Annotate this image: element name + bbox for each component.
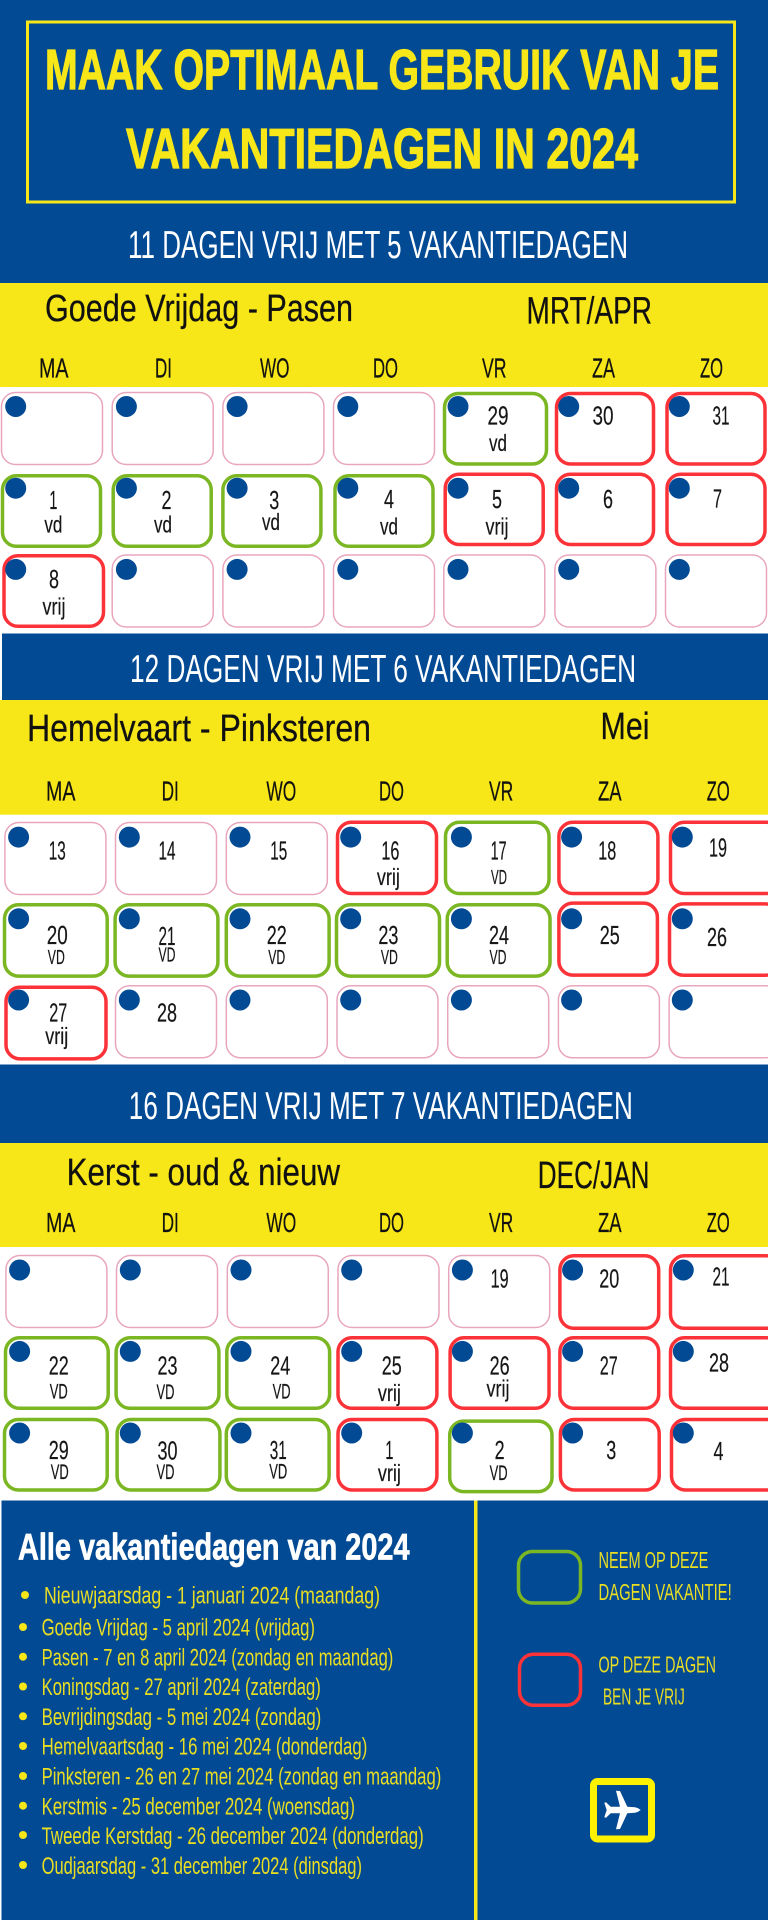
cell: 31 VD bbox=[226, 1420, 329, 1490]
cell: 22 VD bbox=[226, 905, 329, 976]
weekday row: DI bbox=[155, 353, 172, 384]
list item: Nieuwjaarsdag - 1 januari 2024 (maandag) bbox=[44, 1583, 380, 1610]
cell: 2 vd bbox=[113, 476, 211, 546]
cell: 6 bbox=[556, 474, 654, 544]
weekday row: MA bbox=[46, 1207, 76, 1238]
cell: 7 bbox=[667, 474, 765, 544]
empty cell bbox=[448, 986, 549, 1058]
cell: 3 vd: 3 bbox=[269, 485, 279, 515]
cell: 1 vrij bbox=[338, 1420, 437, 1490]
cell: 5 vrij: vrij bbox=[486, 514, 508, 540]
weekday row: DO bbox=[379, 775, 404, 806]
weekday row: VR bbox=[482, 353, 506, 384]
list item: Oudjaarsdag - 31 december 2024 (dinsdag) bbox=[42, 1853, 362, 1880]
subtitle: Goede Vrijdag: Goede Vrijdag - Pasen bbox=[45, 288, 353, 330]
weekday row: ZO bbox=[707, 1207, 730, 1238]
cell: 17 VD: 17 bbox=[491, 836, 507, 866]
panel: footer bbox=[2, 1500, 768, 1920]
cell: 22 VD bbox=[6, 1338, 108, 1408]
empty cell bbox=[226, 986, 327, 1058]
weekday row: WO bbox=[266, 775, 296, 806]
cell: 29 VD: VD bbox=[51, 1461, 69, 1484]
cell: 21 VD: VD bbox=[158, 945, 176, 967]
weekday row: DI bbox=[162, 1207, 179, 1238]
cell: 6: 6 bbox=[603, 484, 613, 514]
cell: 29 VD: 29 bbox=[49, 1435, 69, 1465]
cell: 13 bbox=[5, 822, 106, 894]
cell: 2 vd: 2 bbox=[162, 485, 172, 515]
list item bbox=[19, 1793, 355, 1820]
empty cell bbox=[6, 1256, 107, 1328]
cell: 26 vrij bbox=[450, 1338, 549, 1408]
cell: 26 bbox=[670, 904, 768, 975]
empty cell bbox=[334, 555, 434, 627]
list item: Pasen - 7 en 8 april 2024 (zondag en maandag) bbox=[42, 1644, 393, 1671]
cell: 15 bbox=[226, 822, 327, 894]
empty cell bbox=[669, 986, 768, 1058]
legend: red bbox=[520, 1652, 716, 1710]
cell: 23 VD: 23 bbox=[378, 920, 398, 950]
subtitle: Hemelvaart: Hemelvaart - Pinksteren bbox=[27, 708, 371, 750]
title frame bbox=[28, 22, 734, 202]
cell: 5 vrij: 5 bbox=[492, 484, 502, 514]
cell: 5 vrij bbox=[445, 474, 543, 544]
cell: 26 vrij: vrij bbox=[486, 1375, 510, 1401]
list item bbox=[19, 1644, 393, 1671]
cell: 4 vd: vd bbox=[380, 514, 398, 540]
cell: 18: 18 bbox=[598, 836, 616, 866]
cell: 1 vd bbox=[2, 476, 100, 546]
empty cell bbox=[555, 555, 656, 627]
cell: 4 vd: 4 bbox=[384, 484, 394, 514]
empty cell bbox=[112, 555, 213, 627]
empty cell bbox=[444, 555, 545, 627]
header panel bbox=[0, 0, 768, 283]
panel: holiday list bbox=[18, 1527, 441, 1880]
icon: airplane bbox=[594, 1782, 652, 1839]
cell: 25 bbox=[559, 903, 657, 975]
cell: 4 vd bbox=[335, 476, 433, 546]
cell: 21 VD: 21 bbox=[158, 921, 176, 951]
cell: 25 vrij: 25 bbox=[382, 1351, 402, 1381]
cell: 1 vd: 1 bbox=[49, 485, 57, 515]
weekday row: ZA bbox=[592, 353, 615, 384]
cell: 22 VD: VD bbox=[50, 1380, 68, 1403]
month: MRT/APR: MRT/APR bbox=[526, 291, 652, 333]
cell: 22 VD: 22 bbox=[49, 1351, 69, 1381]
cell: 17 VD bbox=[446, 822, 549, 894]
weekday row: ZA bbox=[598, 775, 622, 806]
month: Mei: Mei bbox=[600, 706, 650, 748]
weekday row: VR bbox=[489, 1207, 513, 1238]
weekday row: WO bbox=[260, 353, 290, 384]
cell: 4 bbox=[672, 1420, 768, 1490]
cell: 3 vd bbox=[223, 476, 321, 546]
weekday row: ZA bbox=[598, 1207, 622, 1238]
list item: Koningsdag - 27 april 2024 (zaterdag) bbox=[42, 1674, 321, 1701]
list heading: Alle vakantiedagen van 2024 bbox=[18, 1527, 410, 1568]
list item: Hemelvaartsdag - 16 mei 2024 (donderdag) bbox=[42, 1734, 367, 1761]
cell: 8 vrij: vrij bbox=[42, 593, 66, 619]
weekday row bbox=[46, 775, 730, 806]
cell: 17 VD: VD bbox=[491, 867, 507, 889]
cell: 22 VD: 22 bbox=[267, 920, 287, 950]
panel: section 1 header bbox=[0, 283, 768, 387]
cell: 29 vd: 29 bbox=[488, 400, 508, 430]
cell: 16 vrij: 16 bbox=[381, 836, 399, 866]
panel: calendar 2 bbox=[4, 822, 768, 1059]
empty cell bbox=[558, 986, 659, 1058]
cell: 27 vrij: 27 bbox=[49, 998, 67, 1028]
cell: 3 vd: vd bbox=[262, 509, 280, 535]
list item bbox=[19, 1764, 441, 1790]
legend: green bbox=[518, 1547, 732, 1605]
cell: 23 VD bbox=[116, 1338, 219, 1408]
cell: 8 vrij: 8 bbox=[49, 564, 59, 594]
cell: 4: 4 bbox=[714, 1436, 724, 1466]
legend: green: NEEM OP DEZE bbox=[598, 1547, 708, 1573]
weekday row: DO bbox=[373, 353, 398, 384]
cell: 20 VD: 20 bbox=[47, 920, 68, 950]
cell: 27 bbox=[560, 1338, 659, 1408]
cell: 23 VD: VD bbox=[381, 947, 398, 969]
weekday row: MA bbox=[46, 775, 76, 806]
cell: 2 VD: 2 bbox=[495, 1435, 505, 1465]
empty cell bbox=[337, 986, 438, 1058]
cell: 29 vd: vd bbox=[489, 430, 507, 456]
list item bbox=[19, 1823, 424, 1850]
cell: 20 bbox=[560, 1256, 659, 1328]
cell: 20 VD: VD bbox=[48, 947, 65, 969]
cell: 7: 7 bbox=[713, 483, 722, 513]
cell: 21: 21 bbox=[712, 1262, 730, 1292]
cell: 28 bbox=[670, 1338, 768, 1408]
cell: 3 bbox=[560, 1420, 659, 1490]
cell: 1 vd: vd bbox=[44, 512, 62, 538]
weekday row: ZO bbox=[700, 353, 723, 384]
cell: 2 vd: vd bbox=[154, 512, 172, 538]
list item bbox=[19, 1614, 315, 1642]
cell: 25 vrij bbox=[338, 1338, 437, 1408]
cell: 21 bbox=[670, 1256, 768, 1328]
cell: 28: 28 bbox=[709, 1347, 729, 1377]
cell: 23 VD: VD bbox=[156, 1381, 174, 1404]
empty cell bbox=[223, 555, 324, 627]
cell: 14 bbox=[116, 822, 216, 894]
cell: 30 VD bbox=[117, 1420, 220, 1490]
weekday row bbox=[39, 353, 723, 384]
title bbox=[45, 38, 719, 181]
weekday row: VR bbox=[489, 775, 513, 806]
cell: 2 VD: VD bbox=[490, 1462, 508, 1485]
cell: 1 vrij: vrij bbox=[378, 1460, 401, 1486]
cell: 25: 25 bbox=[600, 920, 620, 950]
weekday row: ZO bbox=[707, 775, 730, 806]
cell: 30 VD: VD bbox=[156, 1461, 174, 1484]
cell: 19 bbox=[449, 1256, 550, 1328]
legend: red: BEN JE VRIJ bbox=[603, 1684, 685, 1710]
list item: Goede Vrijdag - 5 april 2024 (vrijdag) bbox=[42, 1614, 315, 1642]
cell: 30: 30 bbox=[592, 400, 614, 430]
cell: 27 vrij bbox=[6, 987, 106, 1059]
cell: 30 bbox=[556, 394, 654, 464]
cell: 14: 14 bbox=[158, 836, 176, 866]
cell: 19: 19 bbox=[491, 1263, 509, 1293]
cell: 26: 26 bbox=[707, 922, 727, 952]
cell: 22 VD: VD bbox=[268, 947, 285, 969]
list item bbox=[19, 1853, 362, 1880]
panel: calendar 1 bbox=[2, 392, 766, 627]
empty cell bbox=[112, 392, 213, 464]
cell: 31 bbox=[667, 394, 765, 464]
cell: 31: 31 bbox=[712, 400, 730, 430]
cell: 20: 20 bbox=[599, 1263, 619, 1293]
weekday row: MA bbox=[39, 353, 69, 384]
empty cell bbox=[2, 392, 102, 464]
cell: 30 VD: 30 bbox=[158, 1436, 178, 1466]
cell: 16 vrij: vrij bbox=[377, 864, 400, 890]
empty cell bbox=[223, 392, 324, 464]
cell: 16 vrij bbox=[338, 822, 436, 894]
cell: 31 VD: VD bbox=[269, 1460, 287, 1483]
panel: section 2 header bbox=[0, 634, 768, 815]
cell: 25 vrij: vrij bbox=[378, 1380, 401, 1406]
cell: 1 vrij: 1 bbox=[385, 1435, 393, 1465]
cell: 31 VD: 31 bbox=[270, 1435, 287, 1465]
cell: 24 VD: VD bbox=[490, 947, 506, 969]
cell: 3: 3 bbox=[606, 1435, 616, 1465]
cell: 13: 13 bbox=[49, 836, 66, 866]
cell: 23 VD: 23 bbox=[158, 1351, 178, 1381]
cell: 26 vrij: 26 bbox=[490, 1351, 510, 1381]
weekday row: DO bbox=[379, 1207, 404, 1238]
list item: Kerstmis - 25 december 2024 (woensdag) bbox=[42, 1793, 355, 1820]
cell: 18 bbox=[559, 822, 658, 894]
cell: 21 VD bbox=[115, 905, 218, 976]
cell: 24 VD: VD bbox=[273, 1380, 291, 1403]
cell: 24 VD: 24 bbox=[489, 920, 509, 950]
cell: 8 vrij bbox=[4, 556, 104, 626]
list item bbox=[19, 1704, 321, 1731]
list item: Bevrijdingsdag - 5 mei 2024 (zondag) bbox=[42, 1704, 321, 1731]
weekday row: DI bbox=[162, 775, 179, 806]
cell: 29 vd bbox=[444, 394, 546, 464]
subtitle: Kerst: Kerst - oud & nieuw bbox=[67, 1152, 340, 1194]
cell: 28 bbox=[116, 986, 216, 1058]
panel: calendar 3 bbox=[4, 1256, 768, 1492]
weekday row: WO bbox=[266, 1207, 296, 1238]
cell: 24 VD bbox=[227, 1338, 330, 1408]
list item bbox=[19, 1734, 367, 1761]
cell: 29 VD bbox=[4, 1420, 107, 1490]
weekday row bbox=[46, 1207, 730, 1238]
list item: Tweede Kerstdag - 26 december 2024 (donderdag) bbox=[42, 1823, 424, 1850]
cell: 27 vrij: vrij bbox=[45, 1023, 68, 1049]
list item bbox=[19, 1674, 321, 1701]
empty cell bbox=[666, 555, 766, 627]
cell: 23 VD bbox=[336, 905, 440, 976]
empty cell bbox=[227, 1256, 328, 1328]
month: DEC/JAN: DEC/JAN bbox=[538, 1155, 650, 1197]
cell: 24 VD: 24 bbox=[270, 1351, 290, 1381]
empty cell bbox=[338, 1256, 439, 1328]
list item: Pinksteren - 26 en 27 mei 2024 (zondag en maandag) bbox=[42, 1764, 441, 1790]
cell: 15: 15 bbox=[270, 836, 287, 866]
empty cell bbox=[334, 392, 434, 464]
cell: 27: 27 bbox=[600, 1351, 618, 1381]
cell: 28: 28 bbox=[157, 998, 177, 1028]
cell: 20 VD bbox=[4, 905, 107, 976]
cell: 19 bbox=[670, 822, 768, 894]
cell: 2 VD bbox=[450, 1421, 552, 1492]
cell: 24 VD bbox=[447, 905, 550, 976]
panel: section 3 header bbox=[0, 1064, 768, 1247]
cell: 19: 19 bbox=[709, 832, 727, 862]
empty cell bbox=[116, 1256, 218, 1328]
